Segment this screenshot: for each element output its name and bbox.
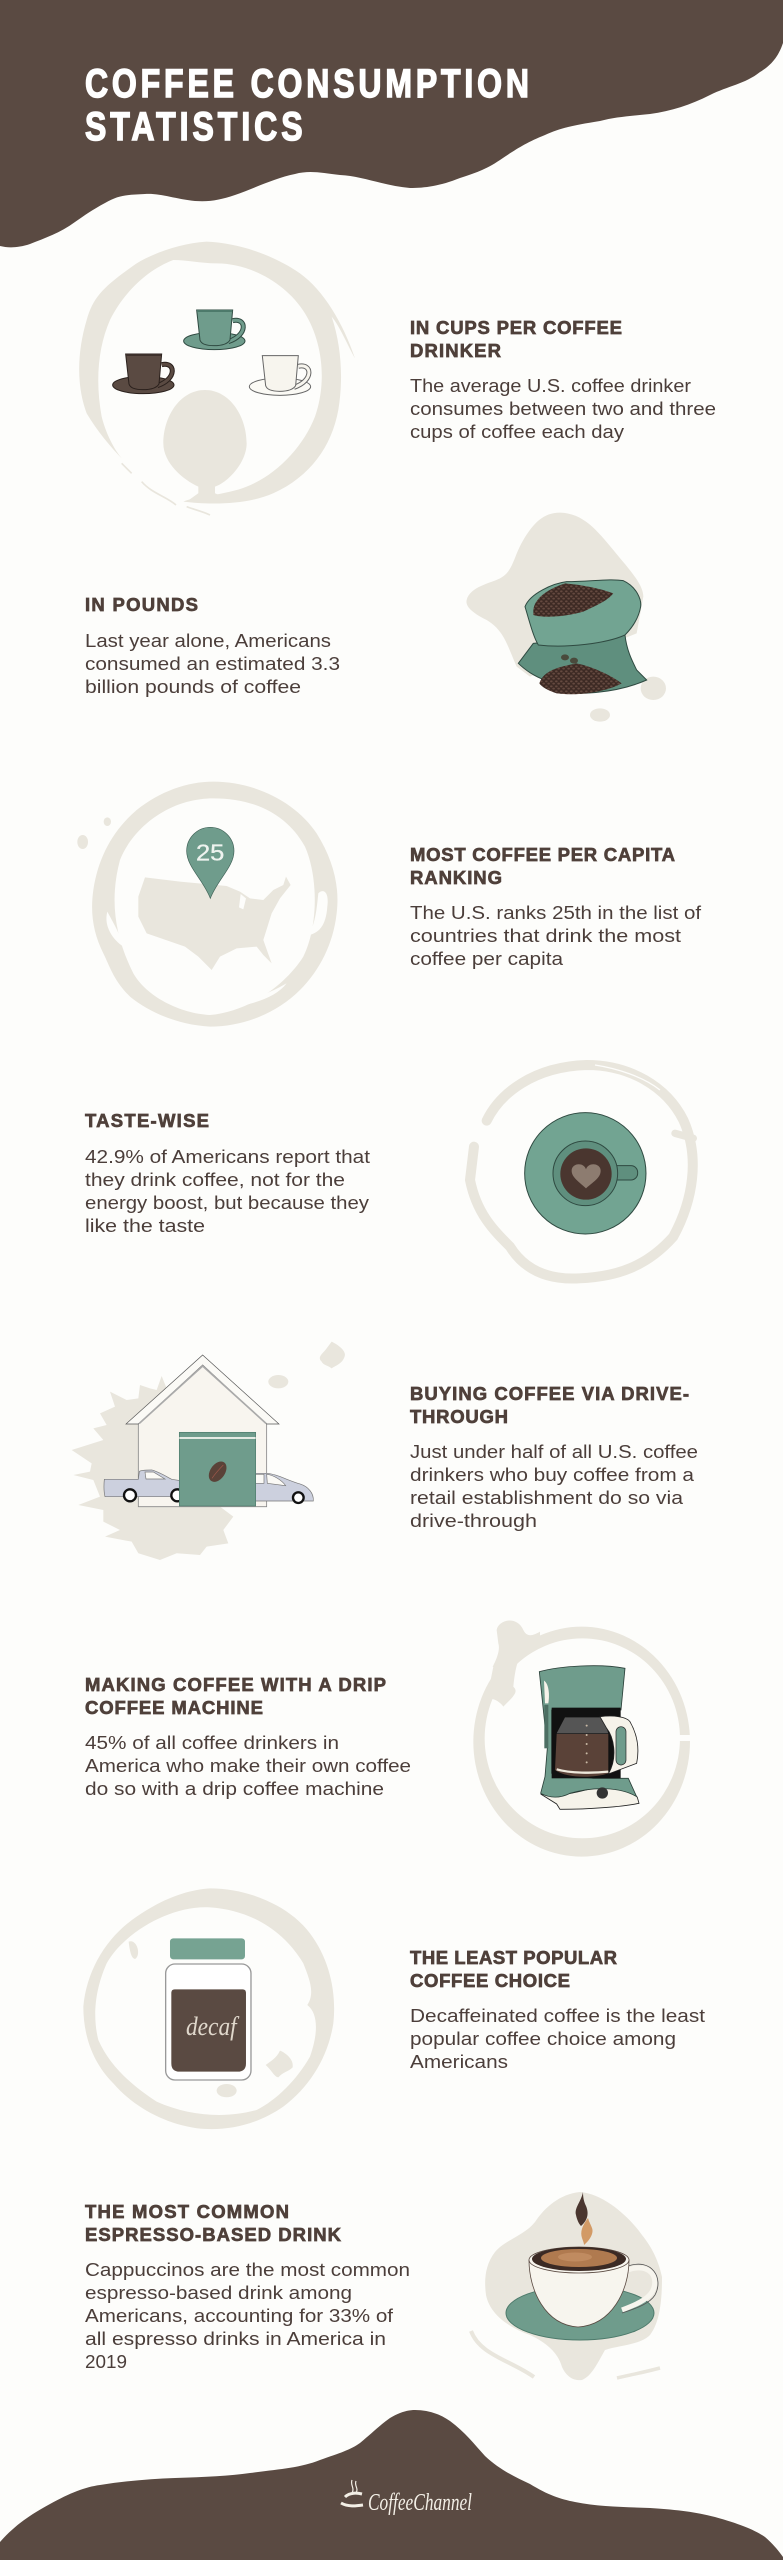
panel: least popular coffee choice (83, 1888, 705, 2129)
title: COFFEE CONSUMPTION (85, 61, 529, 106)
panel: in pounds (85, 513, 666, 722)
panel: taste-wise (85, 1065, 693, 1279)
icon: decaf jar (166, 1938, 251, 2080)
icon: white cup (249, 356, 311, 395)
body text: Decaffeinated coffee is the least (410, 2006, 705, 2026)
icon: logo cup with steam (341, 2480, 363, 2506)
body text (410, 1442, 698, 1531)
icon: coffee ring stain (470, 1065, 693, 1279)
heading (410, 1383, 689, 1427)
body text: consumed an estimated 3.3 (85, 654, 340, 674)
icon: US map (138, 877, 291, 970)
panel: buying coffee via drive-through (72, 1342, 698, 1560)
icon: cappuccino cup and saucer (506, 2247, 658, 2340)
body text: espresso-based drink among (85, 2283, 352, 2303)
garage door (179, 1432, 256, 1506)
body text (410, 376, 716, 442)
body text: Americans (410, 2052, 508, 2072)
heading: THROUGH (410, 1406, 508, 1427)
body text: Last year alone, Americans (85, 631, 331, 651)
body text: The average U.S. coffee drinker (410, 376, 691, 396)
heading: IN POUNDS (85, 594, 198, 615)
icon: top view of coffee cup with heart (525, 1113, 646, 1234)
heading (410, 1947, 617, 1991)
heading: BUYING COFFEE VIA DRIVE- (410, 1383, 689, 1404)
heading: RANKING (410, 867, 502, 888)
body text (410, 903, 702, 969)
panel: most coffee per capita ranking (77, 782, 702, 1027)
body text: Americans, accounting for 33% of (85, 2306, 394, 2326)
body text: Cappuccinos are the most common (85, 2260, 410, 2280)
title (85, 61, 529, 149)
body text: 45% of all coffee drinkers in (85, 1733, 339, 1753)
panel: most common espresso-based drink (85, 2192, 662, 2380)
icon: map pin with rank 25: 25 (196, 839, 224, 865)
heading (85, 1674, 386, 1718)
body text (85, 1147, 370, 1236)
icon: steam (576, 2192, 593, 2245)
body text: they drink coffee, not for the (85, 1170, 345, 1190)
heading: ESPRESSO-BASED DRINK (85, 2224, 342, 2245)
panel: cups per coffee drinker (79, 242, 716, 515)
heading: IN CUPS PER COFFEE (410, 317, 622, 338)
heading: MAKING COFFEE WITH A DRIP (85, 1674, 386, 1695)
heading: COFFEE CHOICE (410, 1970, 570, 1991)
icon: drive-through house with cars (104, 1355, 313, 1507)
title: STATISTICS (85, 104, 303, 149)
body text: America who make their own coffee (85, 1756, 411, 1776)
icon: decaf jar: decaf (186, 2011, 240, 2041)
heading (410, 844, 675, 888)
icon: drip coffee maker (539, 1666, 639, 1809)
body text: 2019 (85, 2352, 127, 2372)
body text (410, 2006, 705, 2072)
heading (85, 2201, 342, 2245)
body text: billion pounds of coffee (85, 677, 301, 697)
header banner (0, 0, 783, 247)
icon: coffee ring stain (83, 1888, 334, 2129)
footer banner (0, 2410, 783, 2560)
left car (104, 1470, 183, 1501)
icon: stain behind cappuccino (471, 2192, 662, 2380)
body text: all espresso drinks in America in (85, 2329, 386, 2349)
heading: DRINKER (410, 340, 501, 361)
body text: countries that drink the most (410, 926, 681, 946)
body text: drive-through (410, 1511, 537, 1531)
icon: map pin with rank 25 (187, 827, 234, 898)
body text (85, 2260, 410, 2372)
body text: cups of coffee each day (410, 422, 624, 442)
heading: THE LEAST POPULAR (410, 1947, 617, 1968)
body text: energy boost, but because they (85, 1193, 369, 1213)
right car (255, 1473, 313, 1503)
logo (341, 2480, 472, 2516)
body text: coffee per capita (410, 949, 564, 969)
icon: stain behind bag (466, 513, 666, 722)
heading: THE MOST COMMON (85, 2201, 289, 2222)
heading (410, 317, 622, 361)
icon: coffee ring stain (473, 1621, 692, 1857)
icon: coffee ring stain with egg-shaped blob (79, 242, 355, 515)
body text (85, 631, 340, 697)
body text: drinkers who buy coffee from a (410, 1465, 695, 1485)
body text: do so with a drip coffee machine (85, 1779, 384, 1799)
body text: The U.S. ranks 25th in the list of (410, 903, 702, 923)
body text: popular coffee choice among (410, 2029, 676, 2049)
icon: green cup (184, 310, 245, 350)
heading: TASTE-WISE (85, 1110, 209, 1131)
panel: drip coffee machine (85, 1621, 692, 1857)
body text: 42.9% of Americans report that (85, 1147, 370, 1167)
body text (85, 1733, 411, 1799)
icon: brown cup (113, 354, 174, 394)
heading: COFFEE MACHINE (85, 1697, 263, 1718)
icon: splash stain (72, 1342, 345, 1560)
icon: coffee ring stain (77, 782, 337, 1027)
body text: consumes between two and three (410, 399, 716, 419)
body text: Just under half of all U.S. coffee (410, 1442, 698, 1462)
logo wordmark: CoffeeChannel (368, 2490, 472, 2516)
icon: bag of coffee beans (518, 580, 647, 694)
heading: MOST COFFEE PER CAPITA (410, 844, 675, 865)
body text: retail establishment do so via (410, 1488, 684, 1508)
body text: like the taste (85, 1216, 205, 1236)
